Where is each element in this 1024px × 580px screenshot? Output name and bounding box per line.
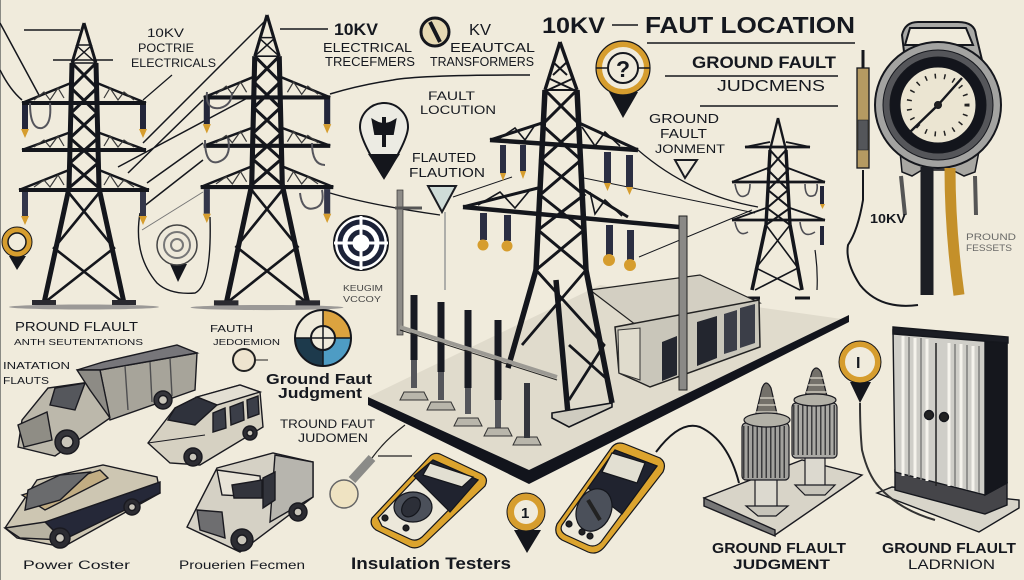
label: tround faut (280, 417, 376, 445)
tower: left (9, 23, 159, 310)
van (148, 385, 263, 466)
box truck (187, 453, 313, 552)
front insulator row (400, 295, 557, 445)
multimeter: left (371, 453, 486, 548)
tower: central (463, 42, 679, 427)
label: flauted flaution: FLAUTION (409, 165, 485, 180)
cabinet (877, 327, 1019, 532)
label: KV transformers: KV (469, 22, 491, 39)
label: fauth judgement: JEDOEMION (213, 337, 280, 347)
title: FAUT LOCATION (645, 12, 855, 38)
label: 10KV poctrie electricals: POCTRIE (138, 41, 194, 55)
pin: numbered right (839, 341, 935, 520)
conductor loops (30, 92, 325, 209)
label: KV transformers: EEAUTCAL (450, 40, 535, 55)
pin: numbered right: I (856, 355, 860, 372)
label: power coster: Power Coster (23, 558, 130, 572)
subtitle (665, 53, 838, 106)
label: tround faut: JUDOMEN (298, 431, 368, 445)
label: ground flault judgment (712, 540, 846, 572)
insulators (742, 368, 837, 516)
label: pround flault: ANTH SEUTENTATIONS (14, 337, 143, 347)
label: ground presets: FESSETS (966, 243, 1012, 253)
subtitle: JUDCMENS (717, 78, 825, 95)
icon: triangle marker small (675, 160, 697, 178)
pin: radar (157, 225, 197, 282)
pin: title question: ? (616, 56, 630, 82)
label: ground flault ladrnion (882, 540, 1016, 572)
pin: white wrench (360, 103, 408, 178)
label: insulation flauts: FLAUTS (3, 376, 49, 387)
label: 10KV poctrie electricals: ELECTRICALS (131, 56, 216, 70)
label: flauted flaution: FLAUTED (412, 150, 476, 165)
substation building (590, 275, 760, 387)
label: 10KV electrical treceimers: 10KV (334, 20, 379, 39)
label: ground flault judgment: JUDGMENT (733, 556, 831, 572)
label: 10KV electrical treceimers: ELECTRICAL (323, 40, 412, 55)
title: 10KV (542, 13, 605, 38)
label: ground fault jonment: FAULT (660, 126, 707, 141)
truck: canvas (18, 345, 197, 456)
label: ground flault ladrnion: LADRNION (908, 556, 995, 572)
label: keugim vccoy: VCCOY (343, 295, 382, 304)
icon: triangle marker (428, 186, 456, 212)
probe (848, 50, 918, 306)
label: KV transformers (421, 18, 535, 69)
label: keugim vccoy (343, 284, 383, 304)
label: ground faut judgment (266, 371, 372, 402)
label: ground faut judgment: Judgment (278, 385, 362, 402)
label: fault location: FAULT (428, 89, 476, 103)
label: 10KV electrical treceimers: TRECEFMERS (325, 54, 415, 69)
icon: small dial (233, 349, 268, 371)
gauge (875, 22, 1001, 295)
label: ground flault judgment: GROUND FLAULT (712, 540, 846, 557)
icon: target (334, 216, 388, 270)
central tower insulators (478, 145, 636, 271)
label: keugim vccoy: KEUGIM (343, 284, 383, 293)
pickup (5, 465, 160, 548)
title (542, 12, 855, 43)
label: insulation flauts: INATATION (3, 361, 70, 372)
power lines (0, 22, 758, 293)
label: ground fault jonment: GROUND (649, 111, 719, 126)
label: pround flault: PROUND FLAULT (15, 319, 138, 334)
label: ground fault jonment (649, 111, 726, 156)
label: insulation testers: Insulation Testers (351, 554, 511, 573)
label: 10KV electrical treceimers (280, 20, 415, 69)
label: ground presets: PROUND (966, 232, 1017, 242)
multimeter: right (556, 426, 739, 553)
label: ground fault jonment: JONMENT (655, 142, 726, 156)
icon: bulb probe (330, 425, 412, 508)
label: fauth judgement: FAUTH (210, 324, 253, 335)
platform (368, 285, 849, 484)
label: tround faut: TROUND FAUT (280, 417, 376, 431)
label: 10KV poctrie electricals (131, 26, 216, 70)
pin: numbered lower: 1 (521, 505, 529, 522)
pin: title question (596, 41, 650, 118)
label: ground flault ladrnion: GROUND FLAULT (882, 540, 1016, 557)
label: 10KV gauge: 10KV (870, 211, 906, 226)
label: flauted flaution (409, 150, 485, 180)
pin: numbered lower (507, 493, 545, 553)
pole and crossarm (395, 190, 687, 390)
label: fault location: LOCUTION (420, 103, 496, 117)
label: 10KV poctrie electricals: 10KV (147, 26, 184, 40)
label: ground faut judgment: Ground Faut (266, 371, 372, 388)
tower: second (190, 15, 344, 310)
label: ground presets (966, 232, 1017, 253)
label: fauth judgement (210, 324, 280, 347)
subtitle: GROUND FAULT (692, 53, 837, 72)
tower: far right (732, 118, 825, 298)
label: fault location (420, 89, 496, 117)
label: prouerien fecmen: Prouerien Fecmen (179, 558, 305, 572)
pin: left gold (2, 227, 32, 270)
insulator plate (704, 460, 862, 536)
label: insulation flauts (3, 361, 70, 387)
label: pround flault (14, 319, 143, 347)
label: KV transformers: TRANSFORMERS (430, 54, 534, 69)
icon: pie dial (295, 310, 351, 366)
